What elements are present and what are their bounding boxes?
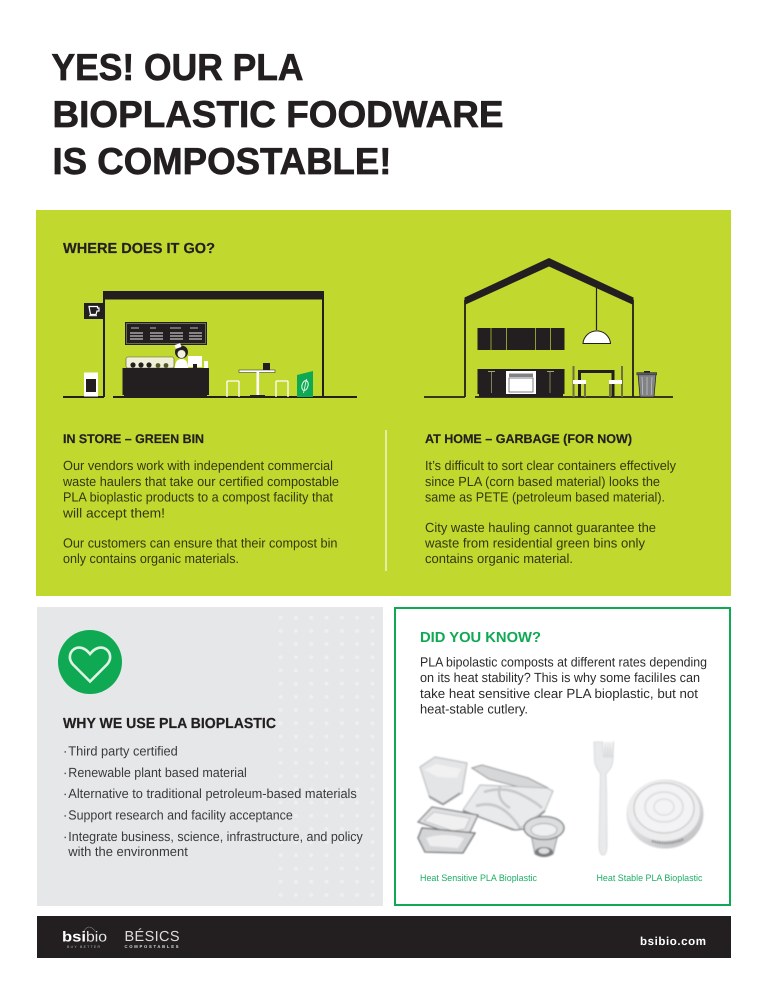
- logo: bsibio: bio: [86, 930, 107, 946]
- caption: heat sensitive: Heat Sensitive PLA Bioplastic: [420, 872, 537, 883]
- icon: green compost bin: [297, 371, 313, 397]
- heading: why we use: WHY WE USE PLA BIOPLASTIC: [63, 716, 276, 732]
- text block: in store: waste haulers that take our certified compostable: [62, 474, 339, 489]
- list: reasons: Renewable plant based material: [68, 765, 247, 780]
- pendant lamp: [583, 288, 610, 344]
- stools and table: [227, 363, 288, 397]
- image: heat sensitive containers: [418, 757, 564, 857]
- icon: heart: [58, 630, 122, 694]
- text block: did you know: [420, 654, 707, 716]
- text block: at home: since PLA (corn based material) looks the: [425, 474, 660, 489]
- text block: at home: [424, 432, 676, 566]
- logo: besics compostables: BÉSICS: [124, 928, 180, 945]
- title: IS COMPOSTABLE!: [52, 140, 392, 182]
- text block: did you know: take heat sensitive clear PLA bioplastic, but not: [420, 686, 698, 701]
- caption: heat stable: Heat Stable PLA Bioplastic: [596, 872, 703, 883]
- text block: at home: waste from residential green bins only: [424, 536, 645, 550]
- list: reasons: ·: [63, 744, 67, 758]
- upper cabinets: [478, 328, 564, 350]
- text block: in store: [62, 432, 339, 566]
- barista: [174, 343, 188, 368]
- panel: why we use PLA bioplastic: [37, 607, 383, 906]
- menu board: [125, 322, 207, 345]
- sandwich board: [84, 372, 98, 396]
- list: reasons: ·: [63, 829, 67, 844]
- text block: at home: AT HOME – GARBAGE (FOR NOW): [425, 432, 632, 446]
- icon: cafe sign: [84, 303, 103, 319]
- text block: in store: Our vendors work with independent commercial: [63, 458, 333, 473]
- title: YES! OUR PLA: [52, 46, 304, 88]
- text block: in store: only contains organic materials.: [63, 551, 239, 566]
- text block: did you know: heat-stable cutlery.: [420, 702, 528, 716]
- list: reasons: Integrate business, science, infrastructure, and policy: [68, 829, 363, 844]
- list: reasons: [63, 744, 363, 859]
- list: reasons: Alternative to traditional petroleum-based materials: [68, 786, 357, 801]
- website: bsibio.com: [640, 936, 706, 948]
- heading: did you know: DID YOU KNOW?: [420, 630, 541, 646]
- list: reasons: ·: [63, 765, 67, 780]
- text block: at home: contains organic material.: [425, 551, 573, 566]
- image: heat stable cutlery and lid: [594, 742, 704, 855]
- list: reasons: Third party certified: [68, 744, 178, 758]
- logo: bsibio: BUY BETTER: [67, 945, 100, 949]
- text block: did you know: PLA bipolastic composts at different rates depending: [420, 654, 707, 670]
- text block: in store: Our customers can ensure that their compost bin: [63, 536, 338, 550]
- list: reasons: ·: [63, 786, 67, 801]
- title: BIOPLASTIC FOODWARE: [52, 93, 504, 135]
- icon: trash can: [637, 371, 657, 397]
- text block: at home: It’s difficult to sort clear containers effectively: [425, 458, 676, 473]
- list: reasons: with the environment: [67, 844, 188, 859]
- text block: did you know: on its heat stability? This is why some faciliIes can: [420, 670, 700, 685]
- lower cabinets and oven: [478, 369, 564, 397]
- heading: where does it go: WHERE DOES IT GO?: [63, 241, 215, 257]
- pastry case: [126, 357, 174, 368]
- logo: besics compostables: COMPOSTABLES: [124, 944, 179, 949]
- footer: [37, 916, 731, 958]
- panel: where does it go: [36, 210, 731, 596]
- counter: [122, 368, 209, 395]
- list: reasons: ·: [63, 808, 67, 822]
- text block: at home: same as PETE (petroleum based material).: [425, 490, 665, 504]
- dining table and chairs: [573, 366, 622, 397]
- illustration: coffee shop: [63, 291, 357, 397]
- logo: bsibio: [62, 927, 107, 949]
- logo: bsibio: bsi: [62, 930, 86, 946]
- illustration: house: [424, 258, 673, 397]
- text block: in store: IN STORE – GREEN BIN: [63, 432, 204, 446]
- register and cup: [188, 356, 208, 368]
- panel: did you know: [395, 608, 730, 905]
- title: [52, 46, 504, 182]
- text block: in store: PLA bioplastic products to a compost facility that: [63, 490, 333, 504]
- text block: in store: will accept them!: [62, 506, 165, 520]
- list: reasons: Support research and facility acceptance: [68, 808, 293, 822]
- text block: at home: City waste hauling cannot guarantee the: [425, 520, 656, 535]
